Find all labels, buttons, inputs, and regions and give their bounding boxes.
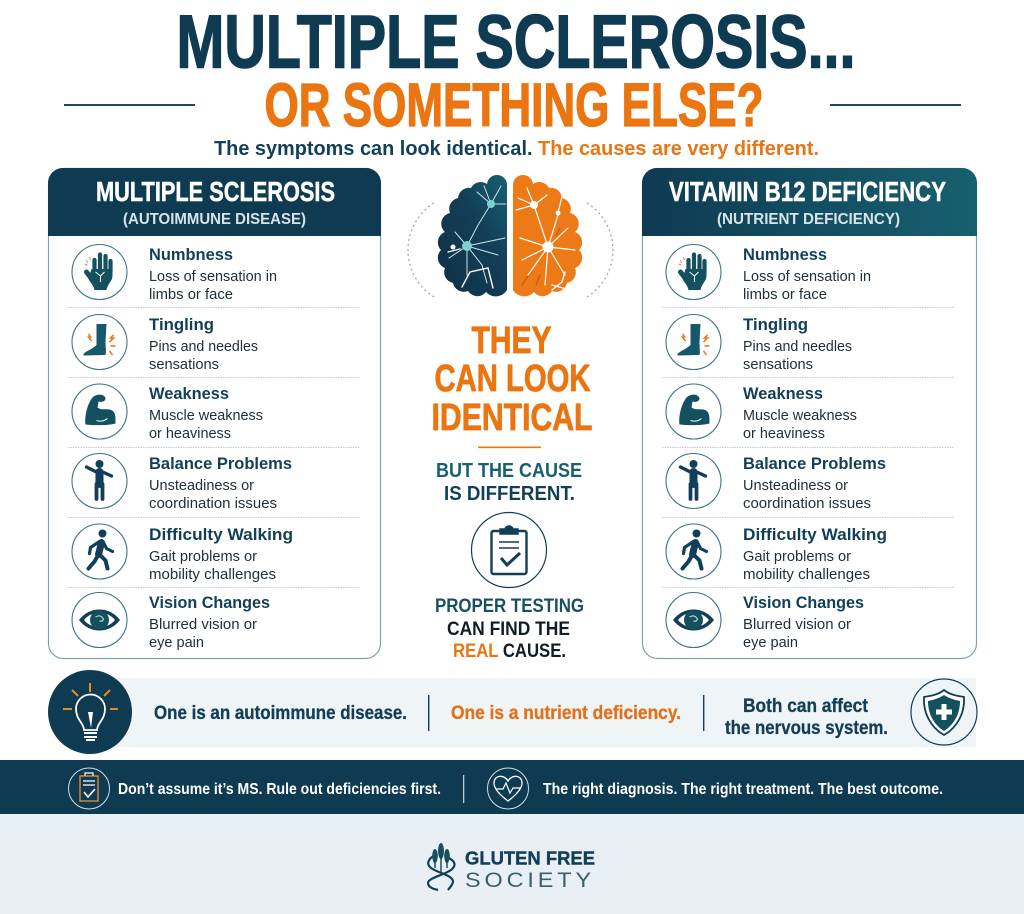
panel: multiple sclerosis — [48, 168, 381, 658]
headline: they can look identical: THEY — [472, 320, 552, 362]
text: proper testing can find the real cause: PROPER TESTING — [435, 595, 584, 617]
headline: they can look identical — [432, 320, 592, 439]
symptom: numbness — [666, 244, 871, 303]
panel header: multiple sclerosis: (AUTOIMMUNE DISEASE) — [123, 211, 306, 228]
panel header: multiple sclerosis — [48, 168, 381, 236]
symptom: balance problems: Unsteadiness or — [149, 478, 254, 494]
symptom: tingling: Tingling — [743, 316, 808, 334]
panel header: vitamin b12 — [642, 168, 977, 236]
symptom: difficulty walking: Difficulty Walking — [743, 526, 887, 544]
symptom: tingling: Tingling — [149, 316, 214, 334]
icon: brain — [408, 175, 613, 297]
text: but the cause is different: IS DIFFERENT. — [444, 483, 575, 505]
headline: they can look identical: CAN LOOK — [434, 358, 591, 400]
symptom: difficulty walking: mobility challenges — [743, 567, 870, 583]
icon: clipboard small — [68, 768, 110, 809]
icon: clipboard — [472, 512, 546, 588]
panel: vitamin b12 deficiency — [642, 168, 977, 658]
symptom: difficulty walking: Difficulty Walking — [149, 526, 293, 544]
footer band: Don’t assume it’s MS. Rule out deficiencies first. — [118, 781, 441, 798]
icon: heart — [488, 768, 528, 809]
symptom: vision changes: eye pain — [743, 635, 798, 651]
footer band: The right diagnosis. The right treatment. The best outcome. — [543, 781, 943, 798]
symptom: weakness: or heaviness — [149, 426, 231, 442]
symptom: vision changes — [72, 592, 270, 651]
symptom: weakness: Muscle weakness — [743, 408, 857, 424]
symptom: tingling: Pins and needles — [149, 339, 258, 355]
symptom: balance problems: Balance Problems — [149, 455, 292, 473]
panel header: vitamin b12: (NUTRIENT DEFICIENCY) — [717, 211, 900, 228]
footer band — [0, 760, 1024, 814]
symptom: numbness: Numbness — [743, 246, 827, 264]
symptom: numbness: limbs or face — [743, 287, 827, 303]
symptom: difficulty walking — [72, 524, 293, 583]
symptom: difficulty walking: mobility challenges — [149, 567, 276, 583]
symptom: weakness: Muscle weakness — [149, 408, 263, 424]
text: proper testing can find the real cause: CAN FIND THE — [447, 618, 570, 640]
symptom: numbness: Loss of sensation in — [743, 269, 871, 285]
symptom: weakness — [72, 384, 263, 442]
subtitle: The symptoms can look identical. The causes are very different. — [214, 138, 819, 160]
summary strip: Both can affect — [743, 696, 869, 717]
symptom: difficulty walking — [666, 524, 887, 583]
icon: shield — [911, 679, 977, 745]
symptom: weakness — [666, 384, 857, 442]
panel header: vitamin b12: VITAMIN B12 DEFICIENCY — [669, 176, 946, 207]
summary strip: One is a nutrient deficiency. — [451, 703, 681, 724]
symptom: vision changes: eye pain — [149, 635, 204, 651]
text: proper testing can find the real cause — [435, 595, 584, 662]
symptom: weakness: Weakness — [743, 385, 823, 403]
symptom: weakness: or heaviness — [743, 426, 825, 442]
symptom: difficulty walking: Gait problems or — [743, 549, 851, 565]
symptom: tingling — [72, 314, 258, 373]
summary strip: One is an autoimmune disease. — [154, 703, 407, 724]
summary strip — [48, 670, 977, 754]
symptom: difficulty walking: Gait problems or — [149, 549, 257, 565]
title: OR SOMETHING ELSE? — [264, 71, 764, 139]
symptom: tingling: sensations — [743, 357, 813, 373]
symptom: numbness: limbs or face — [149, 287, 233, 303]
headline: they can look identical: IDENTICAL — [432, 397, 592, 439]
symptom: numbness: Loss of sensation in — [149, 269, 277, 285]
symptom: balance problems: Unsteadiness or — [743, 478, 848, 494]
symptom: balance problems: coordination issues — [149, 496, 277, 512]
logo: gluten free society: GLUTEN FREE — [465, 848, 595, 868]
symptom: vision changes — [666, 592, 864, 651]
icon: wheat and helix — [428, 843, 455, 890]
title — [176, 0, 856, 139]
symptom: vision changes: Vision Changes — [743, 594, 864, 612]
symptom: balance problems: Balance Problems — [743, 455, 886, 473]
symptom: balance problems: coordination issues — [743, 496, 871, 512]
symptom: numbness — [72, 244, 277, 303]
symptom: balance problems — [72, 454, 292, 512]
symptom: tingling — [666, 314, 852, 373]
logo: gluten free society: SOCIETY — [465, 869, 595, 892]
icon: light bulb — [48, 670, 132, 754]
summary strip: the nervous system. — [725, 718, 888, 739]
symptom: vision changes: Blurred vision or — [149, 617, 257, 633]
panel header: multiple sclerosis: MULTIPLE SCLEROSIS — [96, 176, 335, 207]
symptom: vision changes: Vision Changes — [149, 594, 270, 612]
symptom: vision changes: Blurred vision or — [743, 617, 851, 633]
text: but the cause is different — [436, 460, 582, 505]
symptom: balance problems — [666, 454, 886, 512]
symptom: tingling: sensations — [149, 357, 219, 373]
text: but the cause is different: BUT THE CAUSE — [436, 460, 582, 482]
symptom: tingling: Pins and needles — [743, 339, 852, 355]
symptom: numbness: Numbness — [149, 246, 233, 264]
text: proper testing can find the real cause: REAL CAUSE. — [453, 640, 566, 662]
symptom: weakness: Weakness — [149, 385, 229, 403]
footer logo area — [0, 814, 1024, 914]
logo: gluten free society — [428, 843, 595, 892]
